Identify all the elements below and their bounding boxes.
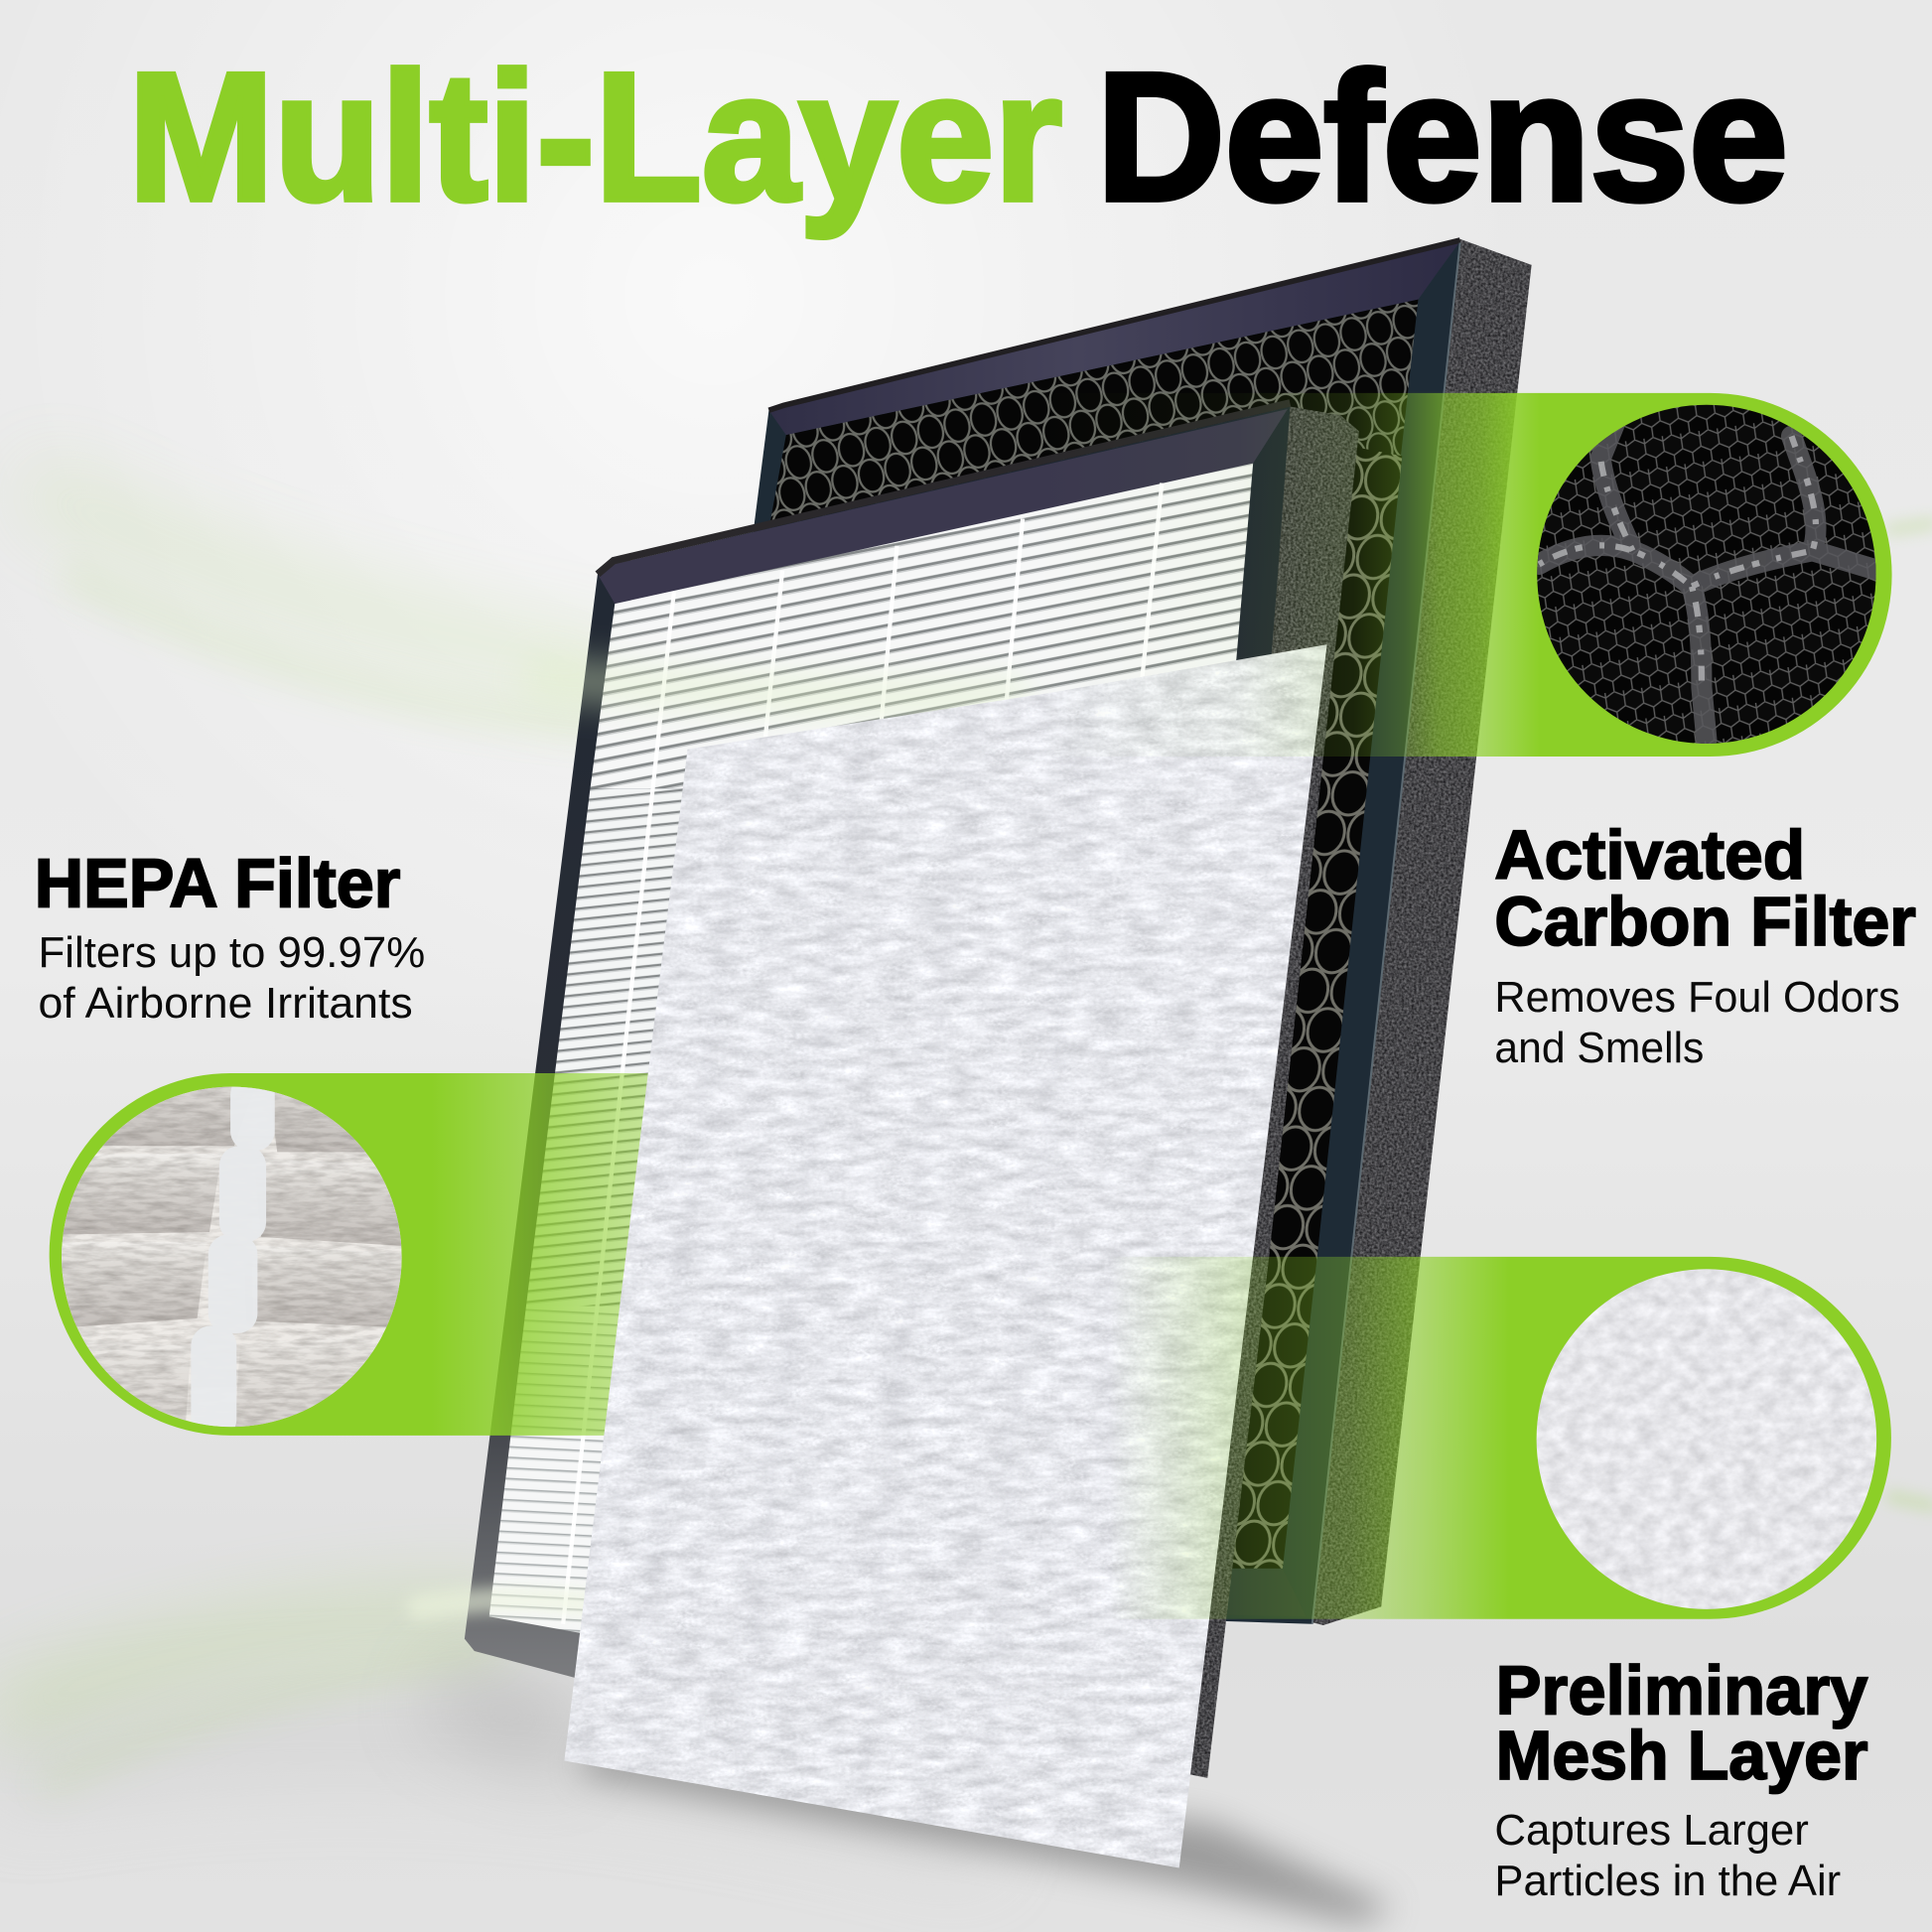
detail circle: carbon honeycomb — [1528, 394, 1885, 752]
pleat rows — [62, 1086, 402, 1428]
label: activated carbon filter: Activated — [1494, 816, 1805, 894]
green callout band: HEPA — [50, 1073, 709, 1436]
title — [128, 35, 1788, 238]
drop shadow under filters — [419, 1657, 1392, 1925]
carbon frame — [617, 242, 1460, 1624]
label: HEPA filter: of Airborne Irritants — [38, 980, 413, 1028]
label: preliminary mesh layer — [1494, 1651, 1868, 1905]
pleat separators — [563, 483, 1162, 1624]
title: Defense — [1097, 35, 1788, 238]
thick honeycomb ribs — [1539, 425, 1874, 740]
mesh fold lines — [640, 684, 1097, 1836]
honeycomb mesh — [640, 300, 1418, 1232]
pleats middle — [526, 788, 763, 1307]
label: HEPA filter — [35, 844, 425, 1028]
rib highlights — [1539, 436, 1816, 688]
HEPA top bevel — [598, 409, 1288, 604]
detail circle: HEPA pleats — [62, 1086, 402, 1428]
carbon foam edge — [1309, 239, 1532, 1625]
green callout band: mesh — [1109, 1257, 1891, 1619]
wisps drifting over the HEPA filter — [419, 678, 1011, 1608]
label: preliminary mesh layer: Particles in the Air — [1494, 1858, 1841, 1905]
activated carbon filter (back layer) — [617, 239, 1532, 1625]
carbon frame top rim — [768, 240, 1460, 410]
honeycomb right strip — [1171, 444, 1402, 1569]
HEPA rim — [598, 403, 1290, 574]
green callout band: carbon — [1035, 393, 1892, 757]
HEPA filter (middle layer) — [465, 403, 1359, 1778]
detail circle: mesh fibre — [1528, 1263, 1885, 1620]
glue seam — [191, 1074, 275, 1440]
label: preliminary mesh layer: Captures Larger — [1494, 1807, 1809, 1855]
carbon frame top bevel — [768, 241, 1460, 435]
carbon frame bottom lip — [1171, 1569, 1307, 1616]
label: activated carbon filter: Carbon Filter — [1494, 883, 1916, 960]
mesh sheet — [564, 644, 1327, 1867]
pleats lower — [489, 1307, 690, 1635]
carbon frame edge highlight — [1312, 242, 1460, 1624]
label: preliminary mesh layer: Preliminary — [1496, 1651, 1868, 1728]
pleats top — [590, 464, 1253, 788]
HEPA frame — [465, 407, 1290, 1762]
HEPA foam edge — [1189, 407, 1359, 1778]
fibre texture — [56, 1082, 407, 1433]
label: preliminary mesh layer: Mesh Layer — [1496, 1717, 1867, 1794]
label: activated carbon filter — [1494, 816, 1916, 1072]
label: HEPA filter: HEPA Filter — [35, 844, 400, 921]
green air wisps behind filters — [12, 492, 1932, 1787]
label: activated carbon filter: and Smells — [1494, 1025, 1704, 1072]
preliminary mesh layer (front sheet) — [564, 644, 1327, 1867]
label: activated carbon filter: Removes Foul Odors — [1494, 974, 1900, 1022]
label: HEPA filter: Filters up to 99.97% — [38, 929, 425, 977]
title: Multi-Layer — [128, 35, 1062, 238]
